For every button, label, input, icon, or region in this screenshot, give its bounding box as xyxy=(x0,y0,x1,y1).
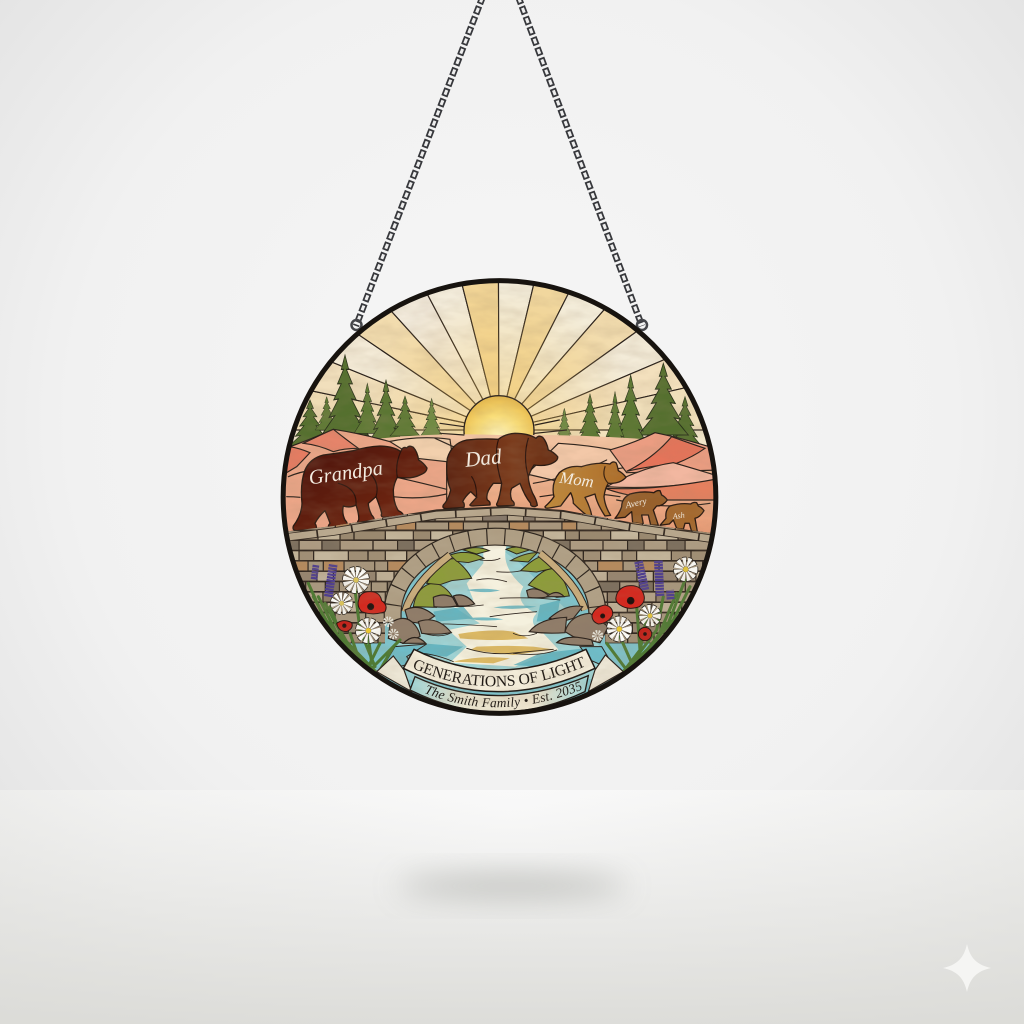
label: Avery: Avery xyxy=(624,497,649,511)
left hanging chain xyxy=(352,0,483,330)
bear: Dad xyxy=(443,433,558,509)
label: Dad: Dad xyxy=(463,444,503,472)
river rocks xyxy=(388,589,608,645)
bear: Grandpa xyxy=(293,446,427,531)
banner ribbon xyxy=(376,648,624,711)
glass mottling overlay xyxy=(280,270,720,717)
label: Ash: Ash xyxy=(671,511,685,521)
outer metal rim xyxy=(283,281,716,713)
foreground water xyxy=(386,644,609,666)
daisies xyxy=(594,562,693,639)
bear: Mom xyxy=(545,462,626,517)
forest right xyxy=(554,363,703,450)
stained glass suncatcher panel xyxy=(280,278,718,716)
title scroll xyxy=(403,649,595,692)
background wall xyxy=(0,0,1024,790)
sun rays xyxy=(296,283,703,431)
wildflowers right xyxy=(592,561,693,672)
banner subtitle: The Smith Family • Est. 2035 xyxy=(425,681,582,710)
label: Grandpa: Grandpa xyxy=(307,457,384,489)
moss banks xyxy=(413,547,569,607)
bear cub: Avery xyxy=(615,491,667,525)
bridge wall xyxy=(277,506,723,643)
right hanging chain xyxy=(518,0,647,330)
sun xyxy=(463,395,535,435)
poppies xyxy=(337,592,386,632)
banner title: GENERATIONS OF LIGHT xyxy=(414,656,584,686)
stone arch xyxy=(393,537,597,623)
lower base glass xyxy=(350,546,655,702)
lavender xyxy=(638,561,671,599)
lavender xyxy=(314,564,333,597)
floor shadow xyxy=(397,875,627,897)
bear cub: Ash xyxy=(660,502,704,532)
family strip xyxy=(410,676,588,712)
sky base xyxy=(293,430,707,445)
label: Mom: Mom xyxy=(557,468,595,491)
poppies xyxy=(592,586,652,641)
floor xyxy=(0,790,1024,1024)
river and water under arch xyxy=(380,546,600,680)
daisies xyxy=(335,572,397,638)
grass blades xyxy=(308,583,400,673)
bridge stones xyxy=(283,511,720,638)
wildflowers left xyxy=(308,564,400,673)
grass blades xyxy=(607,580,690,672)
icon: sparkle watermark xyxy=(943,944,991,992)
hills and landscape xyxy=(280,420,720,537)
ribbon tails xyxy=(377,655,623,692)
forest left xyxy=(288,355,443,447)
